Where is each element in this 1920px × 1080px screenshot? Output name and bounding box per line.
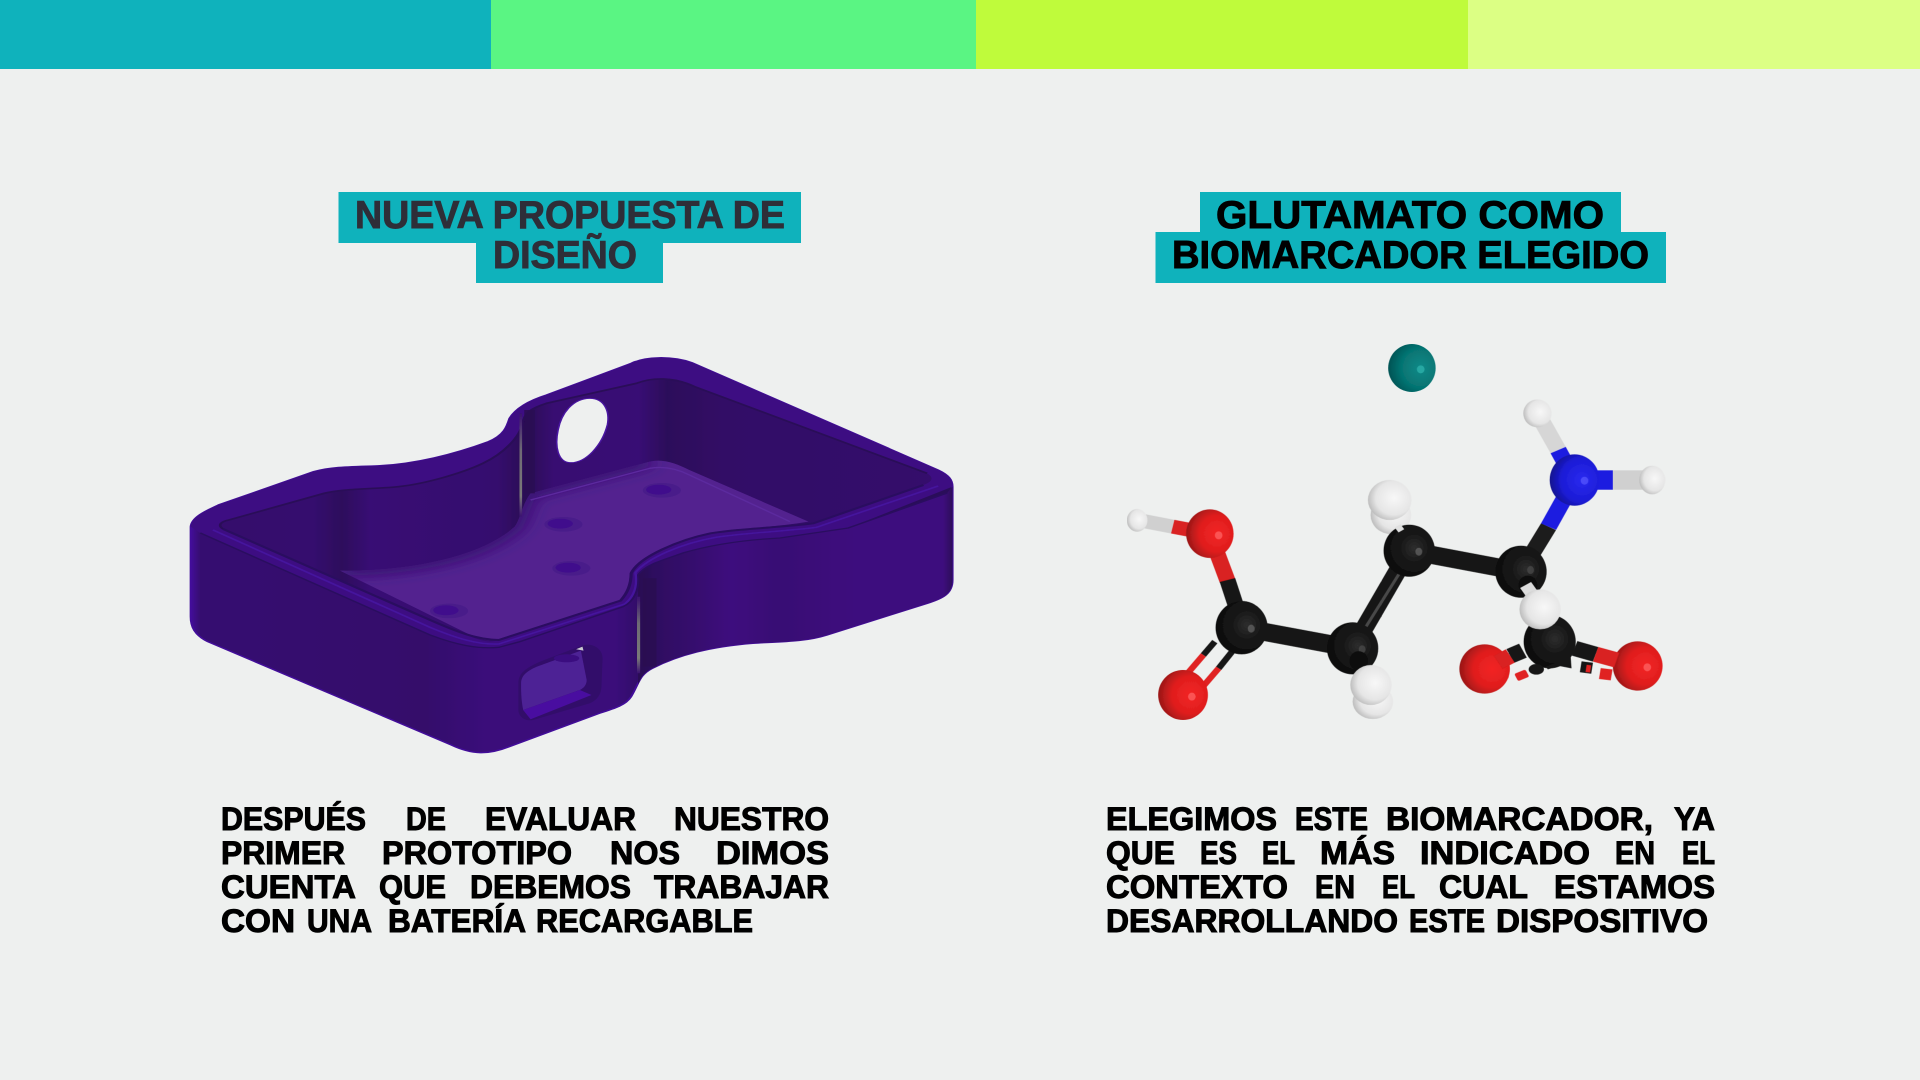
enclosure cavity wall [220, 379, 932, 641]
body text: left column: CUENTA [221, 869, 356, 905]
free ion sphere [1388, 344, 1436, 392]
enclosure floor ridge [531, 467, 790, 522]
body text: right column: CUAL [1439, 869, 1528, 905]
body text: right column: EN [1315, 869, 1355, 905]
body text: right column: ESTAMOS [1554, 869, 1715, 905]
atom: carbon 4 with hydrogen [1495, 546, 1561, 629]
enclosure floor [340, 461, 809, 640]
body text: left column: TRABAJAR [654, 869, 829, 905]
atom: carbon 3 [1384, 525, 1435, 577]
body text: left column [221, 801, 829, 939]
body text: right column: ES [1200, 835, 1237, 871]
heading: glutamato como biomarcador elegido: GLUTAMATO COMO [1216, 194, 1604, 237]
body text: left column: DESPUÉS [221, 801, 366, 837]
body text: left column: NUESTRO [674, 801, 829, 837]
atom: oxygen, lower left [1158, 670, 1208, 720]
body text: left column: NOS [610, 835, 680, 871]
body text: right column: DISPOSITIVO [1496, 903, 1708, 939]
3D device enclosure [191, 358, 953, 753]
glutamate molecule model [1127, 344, 1665, 720]
body text: right column: EN [1615, 835, 1655, 871]
enclosure right face [638, 487, 953, 685]
body text: right column: MÁS [1320, 835, 1395, 871]
body text: left column: DIMOS [716, 835, 829, 871]
heading: glutamato como biomarcador elegido [1156, 192, 1666, 283]
atom: carbon 1 [1216, 601, 1268, 654]
body text: right column: ELEGIMOS [1106, 801, 1277, 837]
atom: oxygen, right [1575, 641, 1663, 691]
bonds [1138, 413, 1652, 688]
body text: left column: BATERÍA [388, 903, 526, 939]
body text: left column: RECARGABLE [536, 903, 753, 939]
body text: right column: INDICADO [1420, 835, 1590, 871]
atom: oxygen, upper left [1186, 509, 1234, 558]
body text: right column: DESARROLLANDO [1106, 903, 1398, 939]
screw holes [430, 483, 681, 618]
inner wall light streak [519, 413, 522, 517]
floor shading near wall [340, 462, 650, 571]
atom: oxygen, right left [1459, 644, 1523, 694]
body text: left column: QUE [379, 869, 446, 905]
inner wall dark band [520, 410, 540, 493]
body text: left column: CON [221, 903, 295, 939]
heading: glutamato como biomarcador elegido: BIOMARCADOR ELEGIDO [1172, 234, 1649, 277]
body text: left column: PROTOTIPO [382, 835, 572, 871]
body text: right column: YA [1674, 801, 1715, 837]
enclosure rim [191, 358, 953, 648]
rectangular side window [518, 645, 603, 720]
body text: right column: EL [1382, 869, 1415, 905]
body text: right column: BIOMARCADOR, [1386, 801, 1653, 837]
body text: left column: EVALUAR [485, 801, 636, 837]
atom: hydrogen, top [1523, 399, 1552, 427]
atom: nitrogen [1550, 454, 1599, 506]
body text: left column: PRIMER [221, 835, 345, 871]
body text: right column: ESTE [1409, 903, 1485, 939]
body text: left column: UNA [307, 903, 372, 939]
top colour band [0, 0, 1920, 69]
body text: left column: DEBEMOS [470, 869, 631, 905]
broken double-bond fragments [1514, 657, 1612, 681]
atom: carbon 5 (back) [1524, 615, 1576, 668]
atoms: hydrogen pair, upper [1368, 480, 1412, 534]
body text: left column: DE [406, 801, 446, 837]
body text: right column [1106, 801, 1715, 939]
body text: right column: EL [1262, 835, 1295, 871]
enclosure outer body [191, 358, 953, 753]
cavity top edge line [220, 379, 927, 529]
side hole in wall [557, 398, 608, 463]
atom: carbon 2 with hydrogens [1327, 622, 1393, 719]
heading: nueva propuesta de diseño [338, 192, 801, 283]
body text: right column: EL [1682, 835, 1715, 871]
outer corner light streak [637, 597, 640, 673]
body text: right column: QUE [1106, 835, 1175, 871]
heading: nueva propuesta de diseño: NUEVA PROPUESTA DE [355, 194, 785, 237]
body text: right column: ESTE [1295, 801, 1368, 837]
heading: nueva propuesta de diseño: DISEÑO [493, 233, 637, 277]
atom: hydrogen, right [1639, 466, 1665, 494]
rim lip lines [200, 485, 947, 648]
atom: hydrogen, left [1127, 509, 1147, 532]
outer corner dark band [637, 578, 663, 667]
body text: right column: CONTEXTO [1106, 869, 1288, 905]
